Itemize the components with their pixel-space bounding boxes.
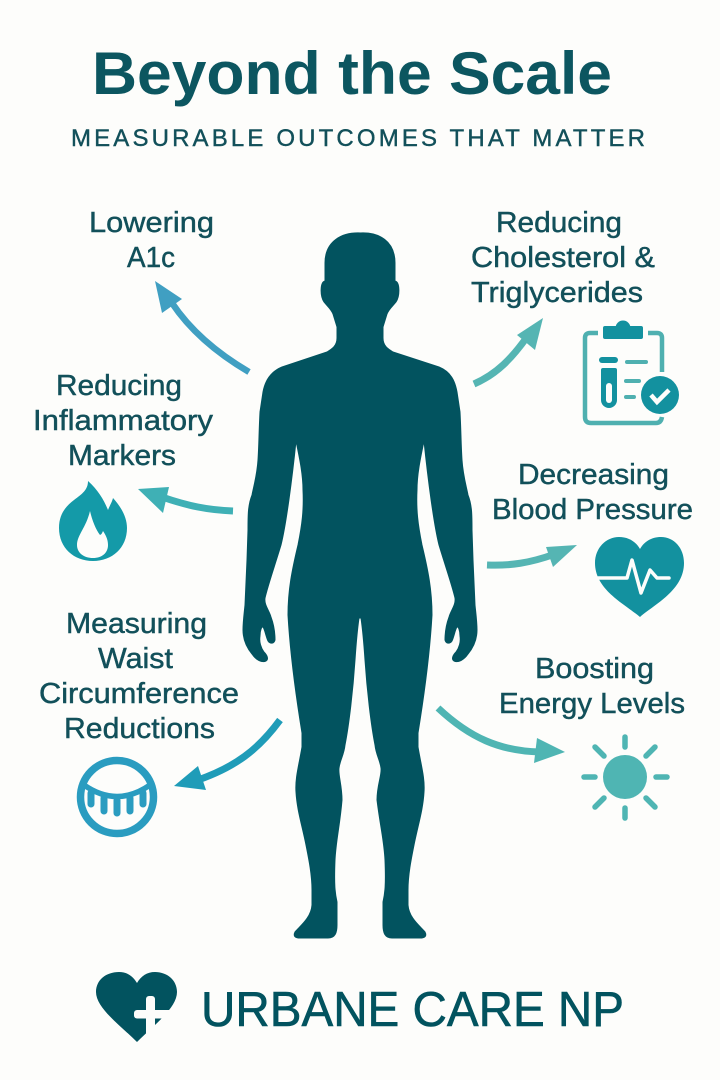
label: reducing cholesterol: Cholesterol & xyxy=(471,242,655,274)
icon: clipboard with test tube xyxy=(585,320,679,423)
arrow: to waist xyxy=(174,720,280,790)
arrow: to lowering A1c xyxy=(155,281,249,372)
label: reducing cholesterol: Reducing xyxy=(496,207,622,239)
icon: heart with pulse xyxy=(595,537,684,617)
label: waist circumference: Measuring xyxy=(66,608,207,640)
label: inflammatory markers xyxy=(33,370,214,472)
icon: sun xyxy=(584,737,667,818)
subtitle: MEASURABLE OUTCOMES THAT MATTER xyxy=(71,125,645,152)
label: lowering A1c xyxy=(89,207,214,274)
arrow: to energy xyxy=(438,708,565,763)
label: boosting energy xyxy=(499,653,685,720)
arrow: to cholesterol xyxy=(474,318,543,384)
label: waist circumference: Circumference xyxy=(39,678,239,710)
icon: waist measuring band xyxy=(80,760,154,834)
label: lowering A1c: Lowering xyxy=(89,207,214,239)
label: reducing cholesterol xyxy=(471,207,655,309)
arrow: to inflammatory markers xyxy=(138,487,233,513)
label: decreasing blood pressure: Blood Pressure xyxy=(492,494,693,526)
label: lowering A1c: A1c xyxy=(127,242,175,274)
footer brand name: URBANE CARE NP xyxy=(201,983,624,1037)
label: inflammatory markers: Reducing xyxy=(56,370,182,402)
icon: flame xyxy=(59,481,127,561)
title: Beyond the Scale xyxy=(92,40,612,107)
label: waist circumference: Waist xyxy=(98,643,173,675)
label: decreasing blood pressure: Decreasing xyxy=(518,459,669,491)
label: boosting energy: Boosting xyxy=(535,653,654,685)
label: inflammatory markers: Markers xyxy=(68,440,176,472)
label: reducing cholesterol: Triglycerides xyxy=(471,277,643,309)
logo: heart with plus xyxy=(96,972,178,1042)
arrow: to blood pressure xyxy=(487,545,577,567)
label: waist circumference xyxy=(39,608,239,745)
body silhouette xyxy=(243,233,477,938)
label: boosting energy: Energy Levels xyxy=(499,688,685,720)
label: inflammatory markers: Inflammatory xyxy=(33,405,214,437)
label: decreasing blood pressure xyxy=(492,459,693,526)
label: waist circumference: Reductions xyxy=(64,713,215,745)
